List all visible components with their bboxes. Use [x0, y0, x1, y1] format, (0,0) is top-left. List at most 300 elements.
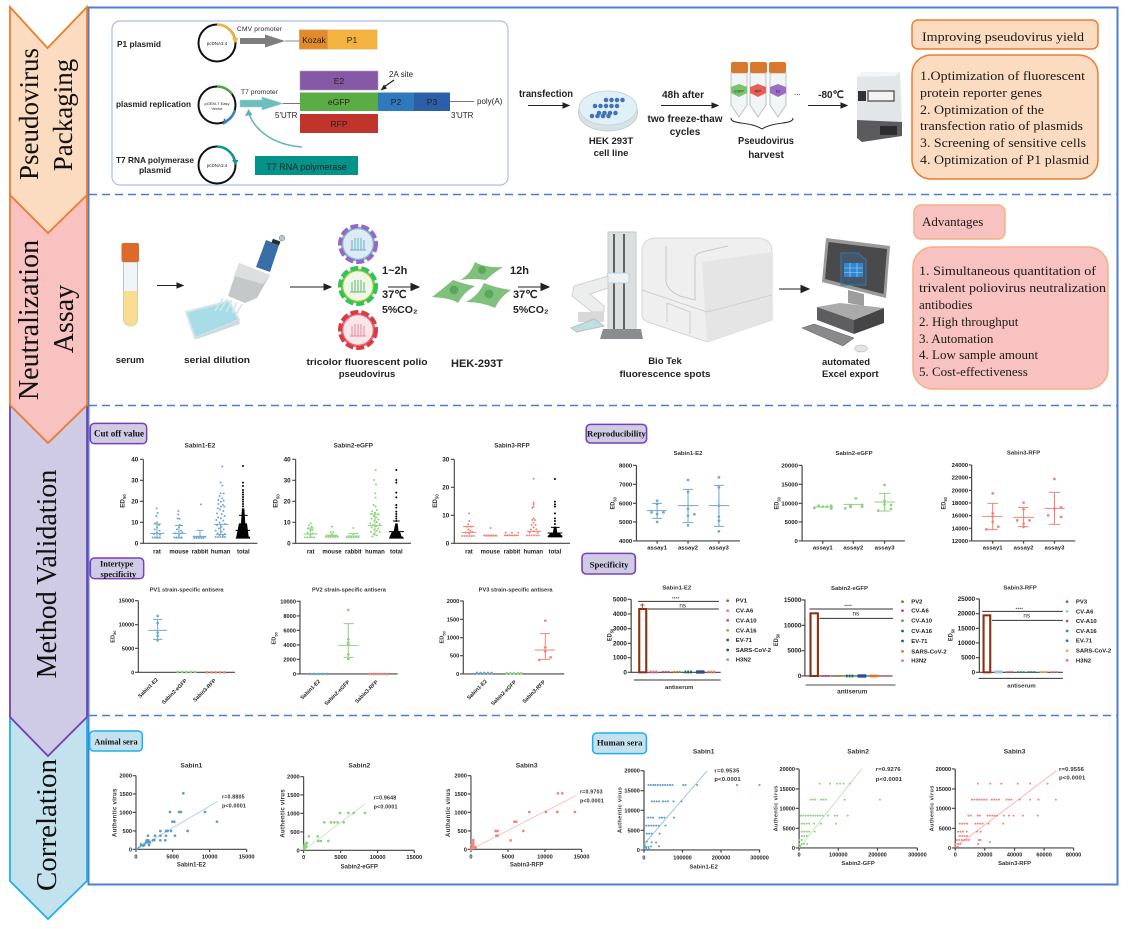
chart: animal Sabin2: 0: [302, 855, 305, 861]
chart: cut-off Sabin1-E2: mouse: [169, 549, 189, 555]
badge: intertype specificity: Intertype: [100, 559, 134, 568]
label: 3'UTR: 3'UTR: [451, 111, 474, 120]
chart: cut-off Sabin3-RFP: mouse: [481, 549, 501, 555]
chart: specificity Sabin3-RFP: 50: [950, 628, 955, 633]
chart: cut-off Sabin1-E2: 30: [131, 478, 139, 485]
chart: human Sabin2: Authentic virus: [774, 785, 780, 831]
chart: cut-off Sabin1-E2: 50: [122, 494, 127, 499]
chart: PV1 antisera: PV1 strain-specific antisera: [150, 587, 224, 593]
chart: reproducibility Sabin2-eGFP: assay1: [813, 546, 834, 552]
chart: specificity Sabin3-RFP: 15000: [958, 625, 976, 632]
label: P1 plasmid: P1 plasmid: [117, 39, 161, 49]
chart: specificity Sabin1-E2: 5000: [613, 596, 628, 603]
chart: reproducibility Sabin3-RFP: [941, 450, 1075, 552]
chart: PV1 antisera: 10000: [119, 623, 134, 629]
label: T7 RNA polymerase plasmid: T7 RNA polymerase: [116, 155, 194, 165]
chart: human Sabin1: 300000: [750, 855, 769, 861]
banner: neutralization assay: Assay: [49, 285, 80, 353]
text block: advantages list: 2. High throughput: [919, 314, 1019, 329]
chart: specificity Sabin3-RFP: ns: [1023, 613, 1030, 620]
chart: human Sabin3: 0: [948, 846, 951, 852]
icon: serum tube: [122, 243, 139, 326]
legend: Sabin2-eGFP: [902, 600, 947, 665]
label: two freeze-thaw cycles: [648, 114, 723, 138]
chart: reproducibility Sabin1-E2: 7000: [619, 482, 632, 488]
chart: animal Sabin1: Sabin1-E2: [177, 863, 206, 869]
chart: animal Sabin2: p<0.0001: [374, 805, 398, 811]
chart: animal Sabin2: 0: [296, 848, 300, 854]
chart: specificity Sabin3-RFP: 10000: [958, 640, 976, 647]
icon: ultra-low freezer: [857, 72, 902, 142]
chart: reproducibility Sabin3-RFP: ED: [941, 502, 947, 509]
label: two freeze-thaw cycles: two freeze-thaw: [648, 114, 723, 125]
chart: cut-off Sabin2-eGFP: 20: [284, 499, 291, 506]
chart: PV2 antisera: Sabin3-RFP: [354, 679, 380, 705]
chart: animal Sabin1: 0: [134, 854, 138, 860]
legend: Sabin2-eGFP: SARS-CoV-2: [911, 649, 947, 655]
legend: Sabin2-eGFP: CV-A16: [911, 629, 933, 635]
chart: cut-off Sabin2-eGFP: total: [390, 549, 403, 555]
text block: advantages list: trivalent poliovirus neutralization: [919, 280, 1107, 295]
chart: animal Sabin2: Sabin2-eGFP: [341, 864, 378, 870]
chart: reproducibility Sabin3-RFP: assay1: [983, 546, 1003, 552]
chart: reproducibility Sabin3-RFP: 22000: [952, 476, 968, 482]
icon: HEK-293T cells: [432, 262, 511, 308]
text block: advantages list: 1. Simultaneous quantitation of: [919, 263, 1097, 278]
chart: cut-off Sabin3-RFP: ED: [432, 499, 439, 508]
chart: reproducibility Sabin3-RFP: assay2: [1014, 546, 1033, 552]
chart: animal Sabin3: 500: [458, 829, 467, 835]
badge: cut off value: [90, 423, 147, 444]
chart: reproducibility Sabin3-RFP: assay3: [1045, 546, 1065, 552]
chart: reproducibility Sabin2-eGFP: [774, 451, 905, 552]
chart: human Sabin2: 0: [792, 846, 795, 852]
chart: human Sabin1: r=0.9535: [714, 768, 740, 774]
block: T7 RNA polymerase: [255, 156, 358, 175]
chart: PV3 antisera: 1000: [447, 636, 459, 642]
chart: human Sabin2: [774, 749, 927, 867]
legend: Sabin1-E2: H3N2: [736, 658, 751, 664]
chart: PV2 antisera: 2000: [283, 657, 296, 663]
label: serum: serum: [116, 355, 144, 366]
chart: specificity Sabin3-RFP: 0: [972, 669, 976, 676]
chart: human Sabin3: 20000: [977, 853, 992, 859]
chart: animal Sabin1: p<0.0001: [222, 803, 246, 809]
chart: cut-off Sabin3-RFP: 20: [442, 485, 450, 492]
chart: reproducibility Sabin3-RFP: Sabin3-RFP: [1007, 450, 1040, 456]
label: poly(A): poly(A): [477, 97, 503, 106]
block: Kozak and P1: Kozak: [302, 35, 327, 45]
chart: human Sabin3: p<0.0001: [1059, 775, 1086, 781]
label: plasmid replication: plasmid replication: [116, 99, 191, 109]
chart: PV3 antisera: Sabin2-eGFP: [490, 679, 518, 707]
label: T7 promoter: T7 promoter: [241, 89, 279, 96]
chart: reproducibility Sabin1-E2: 50: [612, 496, 617, 502]
chart: PV1 antisera: ED: [110, 635, 116, 643]
chart: specificity Sabin2-eGFP: antiserum: [837, 689, 868, 696]
text block: advantages list: [913, 247, 1108, 389]
chart: cut-off Sabin2-eGFP: mouse: [322, 549, 342, 555]
panel: animal sera correlation: [90, 731, 604, 870]
chart: animal Sabin2: 500: [290, 830, 300, 836]
chart: human Sabin1: 20000: [624, 769, 640, 775]
icon: pcDNA3.4 plasmid 2: [198, 146, 238, 184]
chart: animal Sabin1: 1500: [119, 792, 132, 798]
chart: PV3 antisera: 2000: [447, 599, 459, 605]
arrow: T7 promoter: [240, 97, 283, 110]
chart: PV3 antisera: Sabin1-E2: [466, 679, 489, 701]
chart: specificity Sabin3-RFP: 20000: [958, 611, 976, 618]
panel: cut off value: [90, 423, 570, 555]
badge: reproducibility: Reproducibility: [587, 429, 647, 439]
chart: animal Sabin2: Sabin2: [348, 762, 371, 769]
arrow: freeze-thaw: [661, 103, 718, 108]
chart: specificity Sabin1-E2: 3000: [613, 626, 628, 633]
chart: reproducibility Sabin1-E2: 8000: [619, 463, 632, 469]
chart: human Sabin3: Sabin3: [1004, 749, 1026, 756]
chart: animal Sabin1: 15000: [239, 854, 255, 860]
chart: cut-off Sabin2-eGFP: 10: [284, 520, 291, 527]
badge: specificity: Specificity: [590, 560, 629, 569]
chart: human Sabin1: Sabin1: [693, 749, 715, 756]
panel: intertype specificity: [90, 558, 564, 707]
label: T7 RNA polymerase plasmid: plasmid: [139, 165, 171, 175]
label: Pseudovirus harvest: [738, 136, 794, 161]
label: 48h after: 48h after: [662, 90, 704, 101]
chart: specificity Sabin1-E2: 2000: [613, 640, 628, 647]
text block: yield optimization list: protein reporter genes: [920, 85, 1042, 100]
chart: animal Sabin3: r=0.9703: [580, 789, 603, 795]
panel: reproducibility: [586, 424, 1075, 552]
badge: specificity: [582, 553, 635, 574]
chart: specificity Sabin1-E2: ****: [672, 596, 680, 602]
chart: reproducibility Sabin3-RFP: 16000: [952, 514, 968, 520]
heading: advantages: Advantages: [922, 214, 983, 229]
chart: reproducibility Sabin3-RFP: 50: [943, 496, 948, 502]
chart: cut-off Sabin1-E2: human: [211, 549, 231, 555]
text block: yield optimization list: 3. Screening of sensitive cells: [920, 135, 1086, 150]
chart: specificity Sabin2-eGFP: Sabin2-eGFP: [831, 586, 868, 592]
label: Bio Tek fluorescence spots: [620, 356, 710, 380]
heading: advantages: [914, 205, 1005, 239]
legend: Sabin2-eGFP: CV-A10: [911, 619, 932, 625]
chart: animal Sabin1: [113, 762, 255, 869]
chart: PV1 antisera: 50: [112, 630, 117, 635]
chart: reproducibility Sabin2-eGFP: 0: [795, 539, 798, 545]
chart: animal Sabin1: 500: [123, 829, 132, 835]
chart: human Sabin1: p<0.0001: [714, 777, 741, 783]
chart: specificity Sabin1-E2: 1000: [613, 655, 628, 662]
chart: human Sabin2: 10000: [780, 806, 795, 812]
text block: yield optimization list: 1.Optimization of fluorescent: [920, 68, 1085, 83]
chart: human Sabin2: p<0.0001: [876, 777, 903, 783]
chart: PV1 antisera: 15000: [119, 599, 134, 605]
legend: Sabin2-eGFP: EV-71: [911, 639, 928, 645]
banner: neutralization assay: [10, 195, 87, 443]
chart: PV2 antisera: 10000: [280, 599, 296, 605]
label: HEK-293T: HEK-293T: [451, 358, 503, 370]
chart: human Sabin3: r=0.9556: [1059, 767, 1084, 773]
chart: reproducibility Sabin3-RFP: 12000: [952, 539, 968, 545]
icon: three harvest tubes: RFP: [754, 90, 762, 94]
chart: specificity Sabin2-eGFP: 15000: [784, 597, 802, 604]
chart: reproducibility Sabin1-E2: assay1: [647, 546, 668, 552]
badge: cut off value: Cut off value: [94, 429, 144, 439]
label: tricolor fluorescent polio pseudovirus: tricolor fluorescent polio: [306, 357, 428, 368]
chart: PV2 antisera: ED: [272, 637, 278, 644]
chart: animal Sabin3: [446, 762, 604, 869]
label: incubation 1: [382, 265, 418, 316]
label: HEK 293T cell line: HEK 293T: [589, 136, 633, 147]
icon: red pseudovirus: [340, 312, 376, 348]
chart: animal Sabin1: 1000: [119, 810, 132, 816]
chart: cut-off Sabin1-E2: 40: [131, 457, 139, 464]
chart: reproducibility Sabin2-eGFP: 15000: [781, 482, 798, 488]
chart: cut-off Sabin1-E2: ED: [119, 499, 126, 508]
chart: reproducibility Sabin2-eGFP: 50: [776, 496, 781, 502]
chart: human Sabin3: 10000: [936, 806, 951, 812]
chart: cut-off Sabin1-E2: 20: [131, 499, 139, 506]
chart: cut-off Sabin2-eGFP: 0: [287, 541, 291, 548]
chart: specificity Sabin3-RFP: Sabin3-RFP: [1003, 585, 1037, 591]
block: eGFP P2 P3: [300, 92, 450, 111]
chart: human Sabin2: 5000: [783, 826, 795, 832]
chart: animal Sabin2: [280, 762, 422, 870]
chart: human Sabin1: 10000: [624, 808, 640, 814]
label: automated Excel export: automated: [822, 357, 870, 368]
block: eGFP P2 P3: eGFP: [328, 97, 350, 107]
arrow: 2A site: [384, 80, 394, 87]
chart: animal Sabin3: 0: [464, 847, 467, 853]
chart: specificity Sabin1-E2: antiserum: [665, 685, 693, 691]
legend: Sabin1-E2: CV-A6: [736, 609, 754, 615]
chart: PV3 antisera: 500: [450, 654, 459, 660]
block: RFP: RFP: [330, 119, 348, 129]
icon: three harvest tubes: eGFP: [734, 90, 744, 94]
legend: Sabin3-RFP: CV-A6: [1076, 609, 1094, 615]
banner: pseudovirus packaging: Pseudovirus: [14, 48, 44, 180]
chart: specificity Sabin2-eGFP: [774, 586, 947, 696]
icon: green pseudovirus: [340, 268, 376, 304]
chart: human Sabin1: Authentic virus: [617, 787, 623, 833]
chart: cut-off Sabin1-E2: [119, 442, 257, 555]
chart: human Sabin3: Authentic virus: [930, 785, 936, 831]
badge: human sera: [593, 733, 646, 754]
chart: cut-off Sabin3-RFP: [432, 442, 570, 555]
chart: PV3 antisera: Sabin3-RFP: [522, 679, 547, 705]
chart: animal Sabin3: 1500: [454, 792, 467, 798]
block: Kozak and P1: P1: [347, 35, 357, 45]
chart: animal Sabin1: Authentic virus: [113, 788, 119, 837]
chart: PV1 antisera: 0: [131, 670, 134, 676]
chart: PV2 antisera: 6000: [283, 628, 296, 634]
chart: animal Sabin2: Authentic virus: [280, 789, 286, 838]
chart: PV2 antisera: Sabin2-eGFP: [324, 679, 352, 707]
label: Pseudovirus harvest: harvest: [748, 150, 784, 161]
chart: cut-off Sabin3-RFP: 10: [442, 513, 450, 520]
chart: human Sabin2: 15000: [780, 787, 795, 793]
chart: human Sabin1: 200000: [712, 855, 730, 861]
chart: PV1 antisera: [110, 587, 235, 706]
chart: reproducibility Sabin1-E2: 4000: [619, 539, 632, 545]
chart: cut-off Sabin3-RFP: 0: [446, 541, 450, 548]
chart: human Sabin1: [617, 749, 769, 870]
chart: cut-off Sabin1-E2: rabbit: [192, 549, 208, 555]
chart: human Sabin3: 40000: [1007, 853, 1022, 859]
chart: animal Sabin2: r=0.9648: [374, 795, 396, 801]
arrow: transfection: [528, 103, 569, 108]
chart: human Sabin2: Sabin2-GFP: [841, 861, 875, 867]
chart: specificity Sabin1-E2: 0: [623, 669, 628, 676]
chart: PV3 antisera: [440, 587, 564, 707]
chart: human Sabin2: 300000: [908, 853, 927, 859]
label: automated Excel export: [822, 357, 879, 380]
chart: human Sabin2: 20000: [780, 767, 795, 773]
chart: specificity Sabin1-E2: ED: [607, 633, 614, 641]
icon: pcDNA3.4 plasmid 1: pcDNA3.4: [207, 41, 228, 46]
label: incubation 1: 37℃: [382, 289, 407, 301]
block: E2: E2: [334, 76, 344, 86]
label: incubation 1: 5%CO₂: [382, 304, 418, 316]
panel: plasmid constructs: [112, 21, 508, 185]
block: T7 RNA polymerase: T7 RNA polymerase: [266, 162, 347, 172]
chart: animal Sabin3: 1000: [454, 810, 467, 816]
badge: human sera: Human sera: [597, 738, 643, 748]
text block: yield optimization list: transfection ratio of plasmids: [920, 118, 1083, 133]
chart: reproducibility Sabin3-RFP: 24000: [952, 463, 968, 469]
icon: pGEM-T Easy plasmid: Vector: [211, 106, 223, 111]
label: 2A site: 2A site: [389, 70, 414, 79]
label: transfection: transfection: [519, 89, 573, 100]
text block: yield optimization list: 2. Optimization of the: [920, 102, 1044, 117]
legend: Sabin2-eGFP: CV-A6: [911, 609, 930, 615]
chart: cut-off Sabin2-eGFP: 40: [284, 457, 291, 464]
chart: specificity Sabin2-eGFP: 10000: [784, 622, 802, 629]
chart: human Sabin2: r=0.9276: [876, 767, 901, 773]
chart: animal Sabin3: Sabin3-RFP: [510, 863, 543, 869]
chart: animal Sabin2: 5000: [334, 855, 347, 861]
arrow: serum to dilution: [157, 283, 183, 288]
chart: animal Sabin3: 15000: [574, 854, 589, 860]
chart: cut-off Sabin1-E2: total: [237, 549, 250, 555]
arrow: dilution to pseudovirus: [290, 284, 331, 290]
label: CMV promoter: CMV promoter: [237, 26, 283, 33]
text block: yield optimization list: [912, 55, 1098, 179]
chart: human Sabin3: 5000: [939, 826, 951, 832]
badge: reproducibility: [586, 424, 647, 443]
chart: reproducibility Sabin3-RFP: 20000: [952, 488, 968, 494]
legend: Sabin3-RFP: PV3: [1076, 600, 1088, 606]
chart: specificity Sabin2-eGFP: 5000: [787, 648, 802, 655]
legend: Sabin3-RFP: CV-A10: [1076, 619, 1097, 625]
legend: Sabin2-eGFP: H3N2: [911, 659, 926, 665]
chart: animal Sabin3: 0: [469, 854, 473, 860]
banner: method validation: [10, 405, 87, 756]
chart: reproducibility Sabin1-E2: 5000: [619, 520, 632, 526]
label: Bio Tek fluorescence spots: Bio Tek: [648, 356, 683, 367]
chart: PV2 antisera: [272, 587, 398, 707]
chart: PV1 antisera: Sabin3-RFP: [192, 678, 218, 704]
chart: PV1 antisera: Sabin2-eGFP: [161, 678, 189, 706]
chart: specificity Sabin2-eGFP: ED: [774, 638, 780, 646]
chart: reproducibility Sabin1-E2: [611, 451, 740, 552]
chart: cut-off Sabin3-RFP: rat: [465, 549, 473, 555]
chart: specificity Sabin1-E2: ns: [679, 602, 686, 609]
chart: cut-off Sabin2-eGFP: human: [365, 549, 385, 555]
badge: intertype specificity: [90, 558, 144, 579]
chart: animal Sabin1: 5000: [166, 854, 179, 860]
chart: PV2 antisera: 8000: [283, 614, 296, 620]
icon: pcDNA3.4 plasmid 1: [198, 24, 238, 62]
chart: cut-off Sabin3-RFP: rabbit: [504, 549, 520, 555]
chart: human Sabin3: Sabin3-RFP: [998, 861, 1031, 867]
icon: pGEM-T Easy plasmid: pGEM-T Easy: [204, 101, 230, 106]
chart: reproducibility Sabin1-E2: ED: [611, 502, 617, 509]
chart: cut-off Sabin2-eGFP: Sabin2-eGFP: [334, 442, 373, 449]
chart: cut-off Sabin1-E2: rat: [153, 549, 161, 555]
chart: cut-off Sabin2-eGFP: [273, 442, 411, 555]
chart: specificity Sabin2-eGFP: ****: [844, 604, 852, 610]
icon: BioTek fluorescence reader: [571, 232, 772, 342]
chart: PV2 antisera: 50: [273, 631, 278, 637]
icon: computer with Excel export: [802, 238, 890, 352]
legend: Sabin3-RFP: H3N2: [1076, 658, 1091, 664]
text block: advantages list: 3. Automation: [919, 331, 994, 346]
label: -80°C: -80℃: [818, 90, 844, 101]
chart: cut-off Sabin3-RFP: 30: [442, 457, 450, 464]
icon: pcDNA3.4 plasmid 2: pcDNA3.4: [207, 163, 228, 168]
block: eGFP P2 P3: P2: [391, 97, 401, 107]
badge: animal sera: [90, 731, 142, 751]
chart: specificity Sabin1-E2: 50: [609, 628, 614, 633]
label: incubation 2: [510, 265, 549, 316]
legend: Sabin1-E2: PV1: [736, 599, 748, 605]
chart: human Sabin1: 100000: [673, 855, 692, 861]
chart: animal Sabin2: 15000: [406, 855, 422, 861]
chart: reproducibility Sabin2-eGFP: Sabin2-eGFP: [836, 451, 873, 457]
chart: human Sabin3: [930, 749, 1086, 867]
chart: cut-off Sabin2-eGFP: 30: [284, 478, 291, 485]
chart: specificity Sabin2-eGFP: 50: [776, 633, 781, 638]
panel: advantages: [913, 205, 1108, 389]
chart: human Sabin2: 100000: [829, 853, 848, 859]
chart: human Sabin3: 80000: [1066, 853, 1081, 859]
icon: three harvest tubes: E2: [776, 90, 780, 94]
chart: reproducibility Sabin2-eGFP: 20000: [781, 463, 798, 469]
label: Pseudovirus harvest: Pseudovirus: [738, 136, 794, 147]
banner: correlation: [10, 717, 87, 919]
chart: cut-off Sabin2-eGFP: rat: [307, 549, 314, 555]
chart: reproducibility Sabin1-E2: Sabin1-E2: [674, 451, 702, 457]
chart: human Sabin1: Sabin1-E2: [689, 864, 718, 870]
chart: cut-off Sabin2-eGFP: 50: [275, 494, 280, 499]
banner: pseudovirus packaging: Packaging: [48, 59, 78, 171]
chart: PV3 antisera: 50: [441, 630, 446, 636]
chart: animal Sabin3: 5000: [502, 854, 514, 860]
label: HEK 293T cell line: cell line: [594, 148, 628, 159]
chart: human Sabin3: 0: [954, 853, 957, 859]
legend: Sabin1-E2: [728, 599, 771, 664]
legend: Sabin1-E2: EV-71: [736, 638, 753, 644]
icon: three harvest tubes: [731, 62, 801, 129]
chart: specificity Sabin3-RFP: ED: [949, 633, 955, 641]
chart: reproducibility Sabin2-eGFP: assay3: [875, 546, 895, 552]
banner: neutralization assay: Neutralization: [14, 240, 45, 400]
chart: PV3 antisera: PV3 strain-specific antisera: [479, 587, 553, 593]
legend: Sabin3-RFP: SARS-CoV-2: [1076, 649, 1111, 655]
chart: specificity Sabin3-RFP: 25000: [958, 596, 976, 603]
panel: specificity: [582, 553, 1111, 696]
